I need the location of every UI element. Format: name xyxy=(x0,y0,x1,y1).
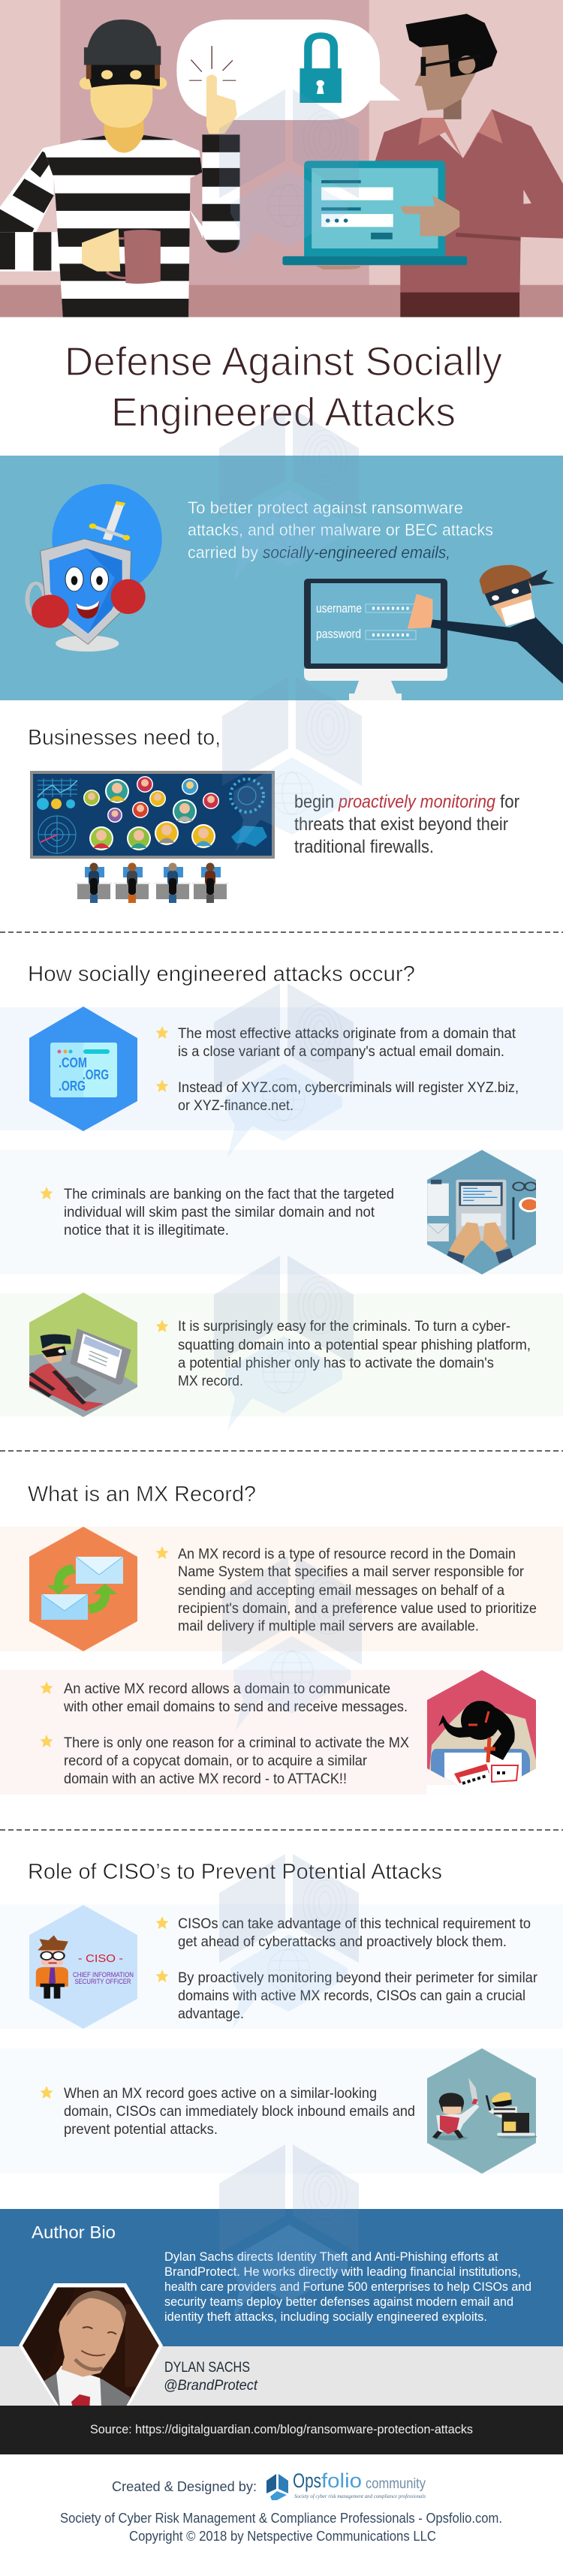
intro text: carried by xyxy=(188,543,259,562)
panel: easy for criminals xyxy=(0,1293,563,1417)
logo: Opsfolio community: Society of cyber risk management and compliance professionals xyxy=(294,2493,426,2499)
icon: domain window hexagon: .ORG xyxy=(59,1079,86,1094)
bullet: cyber-squatting: MX record. xyxy=(178,1374,243,1389)
author name: DYLAN SACHS xyxy=(164,2360,250,2376)
bullet: banking on skimming: individual will skim past the similar domain and not xyxy=(64,1205,375,1220)
icon: security operations wall screen xyxy=(30,771,275,859)
title: Engineered Attacks xyxy=(111,390,456,435)
panel: CISO monitoring xyxy=(0,1904,563,2029)
icon: CISO character hexagon: CHIEF INFORMATION xyxy=(73,1971,134,1979)
heading: how attacks occur: How socially engineered attacks occur? xyxy=(28,962,415,986)
icon: padlock xyxy=(300,35,342,103)
bullet: block emails: When an MX record goes active on a similar-looking xyxy=(64,2086,377,2102)
heading: role of CISOs: Role of CISO’s to Prevent Potential Attacks xyxy=(28,1860,442,1884)
icon: thief reaching into screen xyxy=(408,565,563,684)
icon: domain window hexagon: .COM xyxy=(59,1055,87,1070)
bullet: one reason to activate: domain with an active MX record - to ATTACK!! xyxy=(64,1771,347,1787)
footer copyright: Society of Cyber Risk Management & Compliance Professionals - Opsfolio.com. xyxy=(60,2510,502,2526)
bullet: MX record text: Name System that specifies a mail server responsible for xyxy=(178,1564,525,1580)
bullet: one reason to activate: There is only one reason for a criminal to activate the MX xyxy=(64,1735,409,1751)
bullet: most effective attacks: The most effective attacks originate from a domain that xyxy=(178,1026,516,1042)
panel: close variant domains xyxy=(0,1007,563,1131)
author biography text: Dylan Sachs directs Identity Theft and Anti-Phishing efforts at xyxy=(164,2250,498,2264)
bullet: banking on skimming: notice that it is illegitimate. xyxy=(64,1223,229,1238)
title xyxy=(65,339,502,435)
bullet: MX record text: mail delivery if multiple mail servers are available. xyxy=(178,1618,479,1635)
author biography text: BrandProtect. He works directly with leading financial institutions, xyxy=(164,2265,521,2279)
bullet: MX record text: An MX record is a type of resource record in the Domain xyxy=(178,1546,516,1562)
panel: block inbound emails xyxy=(41,2048,537,2174)
text: proactive monitoring: proactively monitoring xyxy=(338,792,496,812)
bullet: one reason to activate: record of a copycat domain, or to acquire a similar xyxy=(64,1753,368,1769)
bullet: MX record text xyxy=(156,1546,537,1635)
heading: what is an MX record: What is an MX Record? xyxy=(28,1482,256,1506)
panel: active MX record xyxy=(0,1670,537,1801)
author biography text: security teams deploy better defenses against modern email and xyxy=(164,2295,513,2309)
bullet: technical requirement: get ahead of cyberattacks and proactively block them. xyxy=(178,1934,507,1950)
icon: CISO character hexagon: - CISO - xyxy=(78,1952,123,1965)
icon: computer login screen: username xyxy=(316,601,362,615)
bullet: cyber-squatting: a potential phisher only has to activate the domain's xyxy=(178,1356,494,1371)
panel: MX record definition xyxy=(0,1527,563,1651)
avatars xyxy=(83,776,219,850)
burglar character xyxy=(0,20,242,319)
icon: attacker smashing password hexagon xyxy=(426,1670,537,1801)
icon: CISO character hexagon: SECURITY OFFICER xyxy=(75,1978,131,1986)
bullet: crucial advantage: By proactively monitoring beyond their perimeter for similar xyxy=(178,1970,538,1986)
author biography text: identity theft attacks, including socially engineered exploits. xyxy=(164,2310,487,2324)
text: proactive monitoring: traditional firewalls. xyxy=(294,837,434,857)
bullet: block emails: domain, CISOs can immediately block inbound emails and xyxy=(64,2104,415,2120)
author name: @BrandProtect xyxy=(164,2378,258,2394)
icon: shield mascot xyxy=(27,484,162,652)
icon: domain window hexagon: .ORG xyxy=(83,1067,109,1082)
bullet: lookalike domains xyxy=(156,1079,519,1114)
bullet: domain communication xyxy=(41,1681,408,1715)
laptop xyxy=(282,161,467,269)
footer copyright: Copyright © 2018 by Netspective Communications LLC xyxy=(129,2528,436,2544)
speech bubble xyxy=(176,20,400,120)
text: proactive monitoring: threats that exist beyond their xyxy=(294,814,508,835)
bullet: block emails: prevent potential attacks. xyxy=(64,2122,218,2138)
icon: email exchange hexagon xyxy=(29,1527,137,1651)
bullet: cyber-squatting: It is surprisingly easy for the criminals. To turn a cyber- xyxy=(178,1319,510,1335)
icon: computer login screen: password xyxy=(316,627,361,641)
bullet: crucial advantage: domains with active MX records, CISOs can gain a crucial xyxy=(178,1988,525,2004)
bullet: banking on skimming xyxy=(41,1187,394,1238)
bullet: technical requirement: CISOs can take advantage of this technical requirement to xyxy=(178,1916,531,1932)
bullet: MX record text: recipient's domain, and a preference value used to prioritize xyxy=(178,1601,537,1617)
source bar xyxy=(0,2406,563,2454)
bullet: block emails xyxy=(41,2086,415,2138)
author biography text xyxy=(164,2250,531,2324)
bullet: most effective attacks xyxy=(156,1026,516,1060)
man with laptop xyxy=(282,14,563,317)
logo: Opsfolio community: community xyxy=(366,2476,426,2492)
bullet: MX record text: sending and accepting email messages on behalf of a xyxy=(178,1583,504,1599)
heading: author bio: Author Bio xyxy=(32,2222,116,2242)
bullet: crucial advantage xyxy=(156,1970,538,2022)
bullet: cyber-squatting: squatting domain into a potential spear phishing platform, xyxy=(178,1338,531,1353)
title: Defense Against Socially xyxy=(65,339,502,384)
heading: businesses: Businesses need to, xyxy=(28,726,221,750)
bullet: domain communication: with other email domains to send and receive messages. xyxy=(63,1699,408,1715)
panel: author bio xyxy=(0,2209,563,2407)
icon: hacker at computer hexagon xyxy=(29,1293,137,1417)
icon: hands on laptop hexagon xyxy=(427,1150,540,1274)
text: proactive monitoring xyxy=(294,792,519,857)
icon: defender versus thief hexagon xyxy=(427,2048,537,2174)
panel: intro band xyxy=(0,456,563,700)
icon: computer login screen xyxy=(304,579,447,700)
hero illustration xyxy=(0,0,563,319)
footer copyright xyxy=(60,2510,502,2544)
icon: domain window hexagon xyxy=(29,1007,137,1131)
bullet: lookalike domains: Instead of XYZ.com, cybercriminals will register XYZ.biz, xyxy=(178,1080,519,1096)
watermark logos xyxy=(214,89,362,2319)
intro text: attacks, and other malware or BEC attacks xyxy=(188,521,493,540)
bullet: one reason to activate xyxy=(41,1735,409,1787)
bullet: lookalike domains: or XYZ-finance.net. xyxy=(178,1098,294,1114)
text: proactive monitoring: begin xyxy=(294,792,334,812)
intro text: socially-engineered emails, xyxy=(263,543,450,562)
bullet: crucial advantage: advantage. xyxy=(178,2006,244,2022)
credit: created and designed by: Created & Designed by: xyxy=(112,2478,257,2494)
logo: Opsfolio community: folio xyxy=(321,2469,362,2492)
source bar: Source: https://digitalguardian.com/blog/ransomware-protection-attacks xyxy=(90,2422,473,2436)
author portrait xyxy=(19,2283,163,2407)
text: proactive monitoring: for xyxy=(500,792,519,812)
bullet: domain communication: An active MX record allows a domain to communicate xyxy=(64,1681,390,1697)
intro text: To better protect against ransomware xyxy=(188,498,463,517)
author name xyxy=(164,2360,258,2394)
logo: Opsfolio community xyxy=(266,2469,426,2500)
author biography text: health care providers and Fortune 500 enterprises to help CISOs and xyxy=(164,2280,531,2294)
icon: mug and hand xyxy=(82,229,161,284)
intro text xyxy=(188,498,493,562)
icon: analysts at desks xyxy=(76,863,228,903)
logo: Opsfolio community: Ops xyxy=(293,2469,321,2492)
bullet: banking on skimming: The criminals are banking on the fact that the targeted xyxy=(64,1187,394,1202)
bullet: most effective attacks: is a close variant of a company's actual email domain. xyxy=(178,1044,504,1060)
bullet: technical requirement xyxy=(156,1916,531,1950)
icon: CISO character hexagon xyxy=(29,1905,137,2029)
chart and radar widgets xyxy=(38,778,263,853)
panel: skim past domain xyxy=(0,1150,563,1274)
bullet: cyber-squatting xyxy=(156,1319,531,1389)
